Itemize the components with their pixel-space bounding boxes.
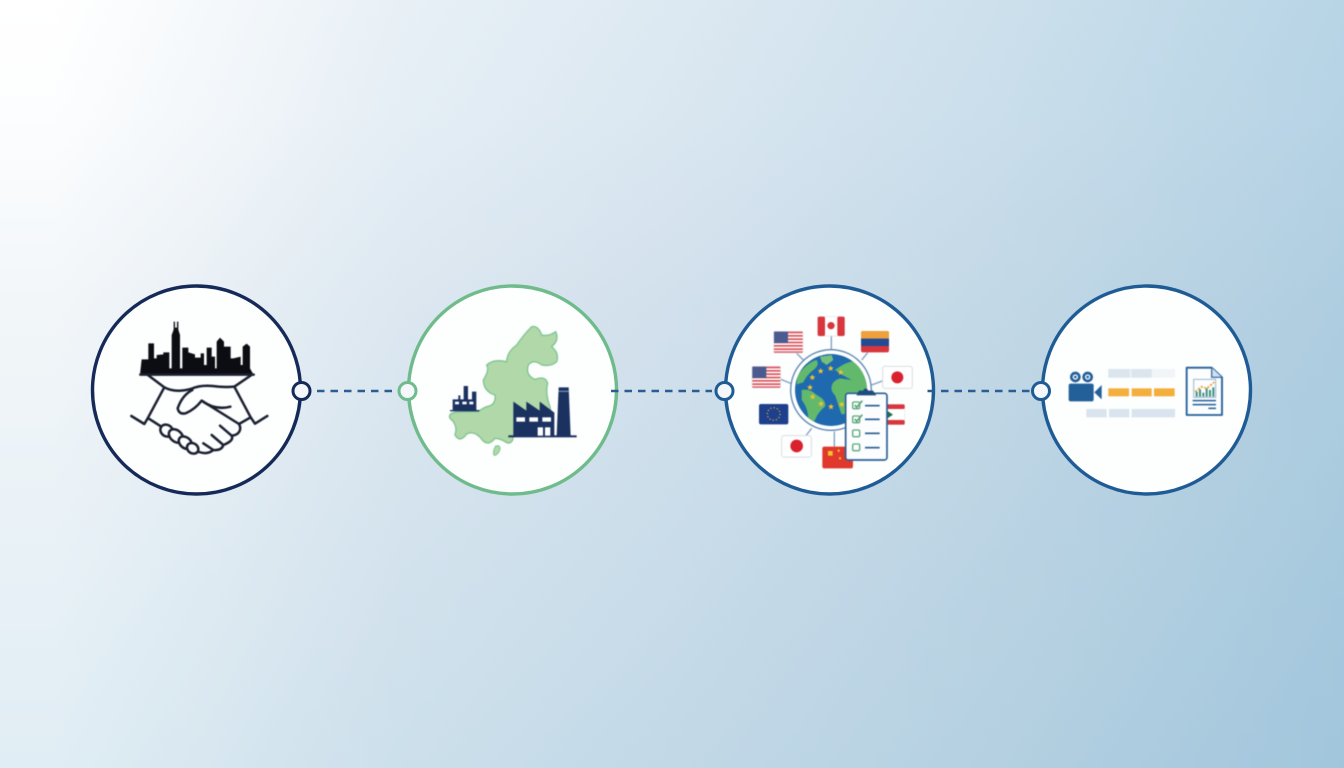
icon: regional map with factories [450, 327, 577, 455]
flag: USA left [752, 366, 781, 388]
small factory [450, 386, 479, 411]
icon: globe, flags and checklist [752, 317, 912, 468]
node: step 1 output [293, 382, 310, 400]
green region map [450, 327, 557, 443]
timeline bars [1086, 369, 1175, 417]
checklist clipboard [846, 388, 887, 460]
flag: USA top [774, 331, 803, 353]
report document [1187, 368, 1222, 415]
node: step 3 input [716, 382, 733, 400]
flag spokes [780, 335, 883, 447]
EU-style stars [807, 365, 845, 409]
video camera [1069, 373, 1102, 401]
large factory and chimney [508, 387, 577, 437]
node: step 4 input [1032, 382, 1050, 400]
panel: regional industry circle [399, 286, 616, 494]
panel: partnership circle [92, 286, 310, 494]
connector: step 2 to step 3 [611, 390, 712, 392]
flag: China [822, 447, 853, 468]
flag: Canada [818, 317, 845, 336]
handshake outline [131, 375, 267, 456]
flag: tricolour [861, 331, 889, 352]
flag: partly hidden right [882, 404, 905, 425]
icon: camera, timeline and report [1069, 368, 1222, 417]
icon: city skyline and handshake [131, 322, 267, 456]
panel: media and reporting circle [1032, 286, 1250, 494]
globe [791, 350, 872, 430]
small island [493, 446, 500, 455]
connector: step 3 to step 4 [928, 390, 1030, 392]
panel: global markets circle [716, 286, 934, 494]
skyline silhouette [140, 322, 253, 374]
connector: step 1 to step 2 [317, 390, 394, 392]
flag: Japan bottom [782, 436, 811, 457]
flag: Japan right [883, 366, 912, 388]
node: step 2 input [399, 382, 416, 400]
flag: EU [759, 404, 788, 424]
